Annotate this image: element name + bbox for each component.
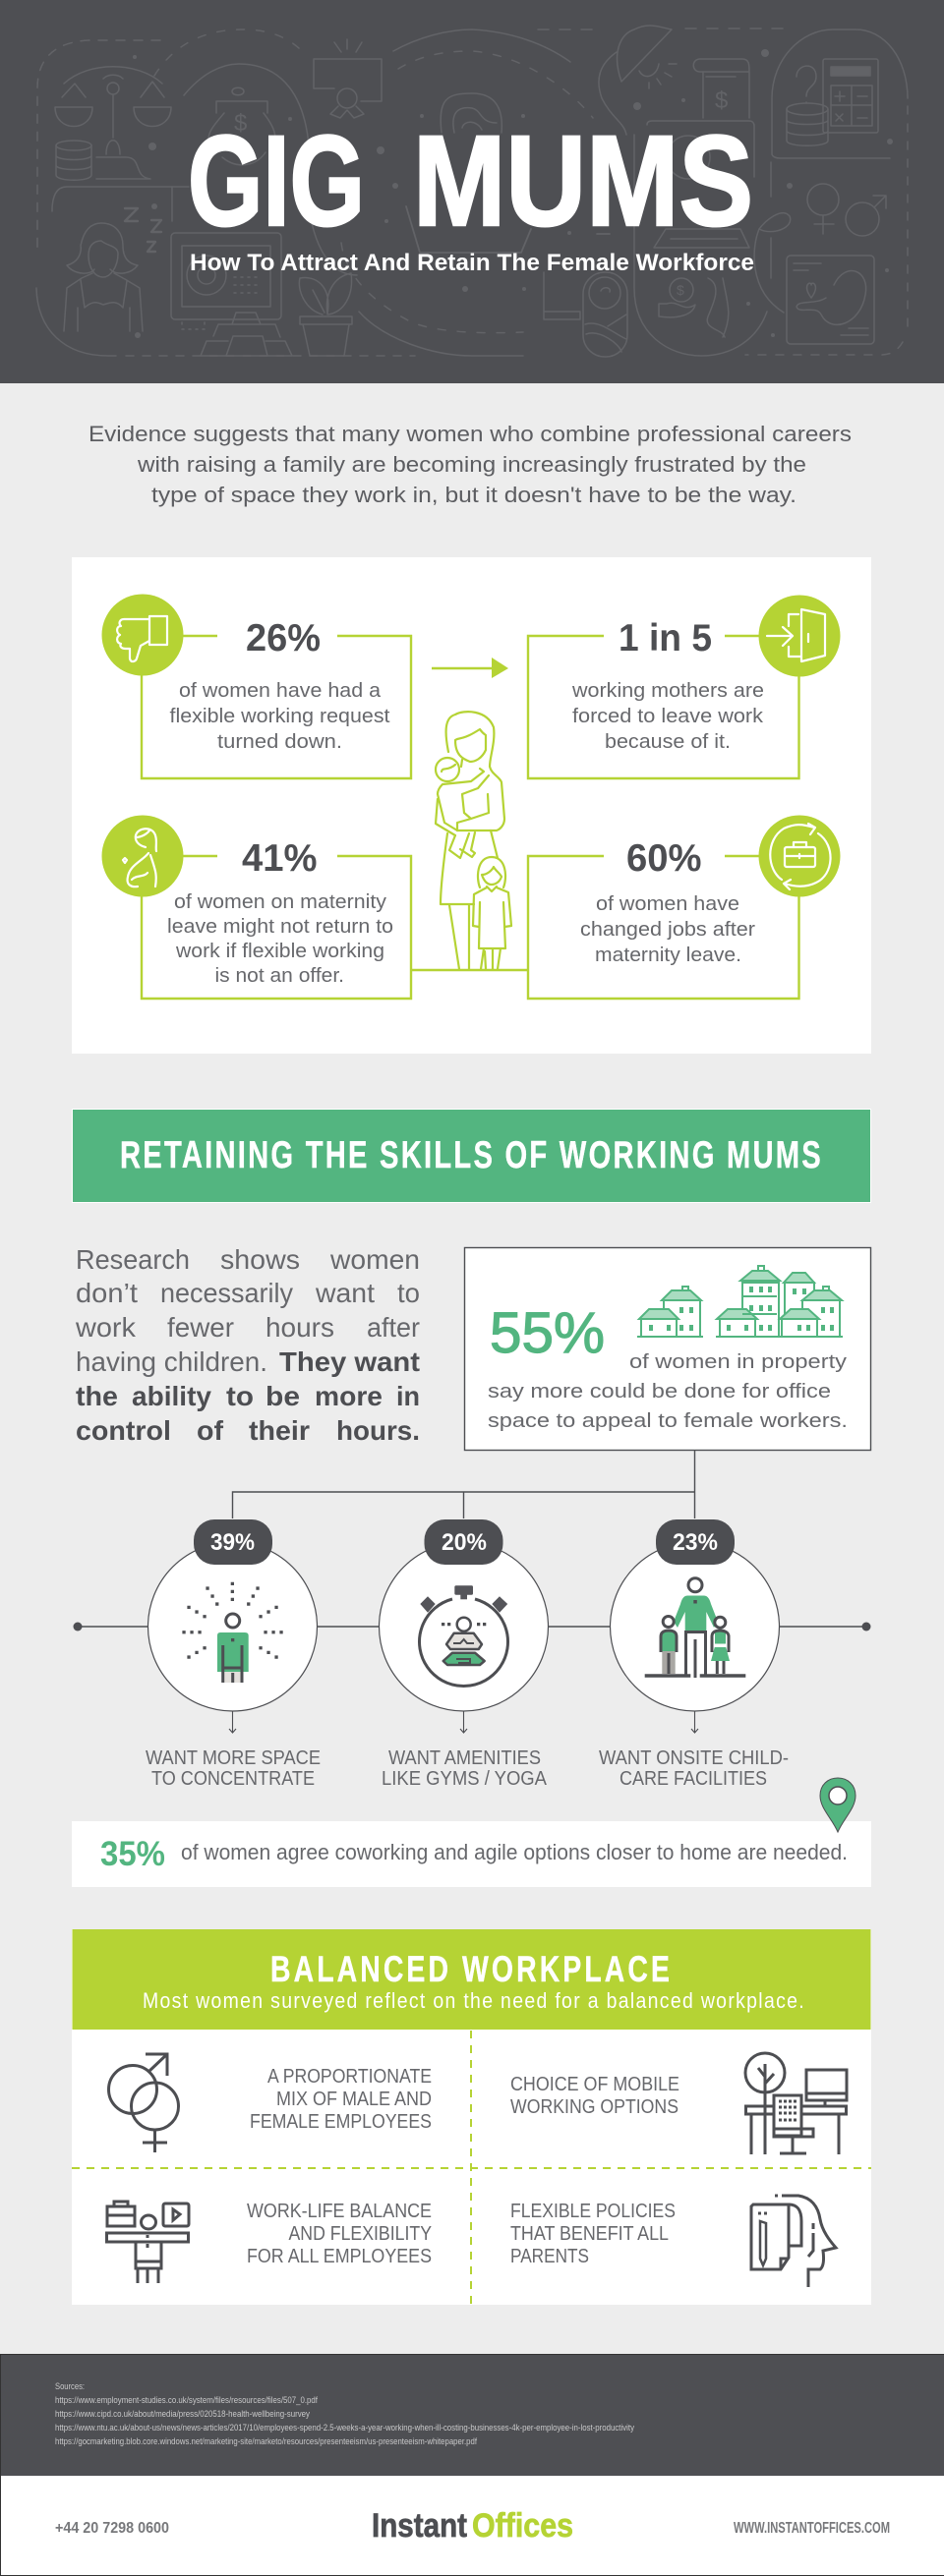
text block: research: hours. bbox=[336, 1415, 420, 1446]
gold bars bbox=[201, 313, 292, 356]
item: proportionate mix bbox=[108, 2054, 432, 2152]
stat: 26%: turned down. bbox=[217, 731, 342, 753]
text block: research: to bbox=[397, 1278, 420, 1308]
item: want more space: 39% bbox=[210, 1529, 255, 1556]
text block: research: their bbox=[249, 1415, 310, 1446]
text block: research: be bbox=[266, 1381, 300, 1411]
sources panel: https://www.ntu.ac.uk/about-us/news/news-articles/2017/10/employees-spend-2.5-weeks-a-year-working-when-ill-costing-businesses-4k-per-employee-in-lost-productivity bbox=[55, 2423, 634, 2433]
heading: balanced workplace: BALANCED WORKPLACE bbox=[270, 1949, 673, 1989]
text block: research: They want bbox=[279, 1346, 420, 1377]
header background line icons: $ bbox=[677, 282, 684, 298]
stat: 60%: maternity leave. bbox=[595, 945, 741, 966]
text block: research: the bbox=[76, 1381, 118, 1411]
text block: research: more bbox=[315, 1381, 383, 1411]
icon: briefcase refresh bbox=[770, 824, 831, 889]
stat box frames bbox=[142, 636, 798, 999]
stat: 60% bbox=[580, 816, 840, 966]
text block: research: after bbox=[367, 1312, 420, 1343]
text block: research: having children. bbox=[76, 1346, 267, 1377]
title: MUMS bbox=[413, 108, 753, 253]
icon: houses bbox=[637, 1266, 843, 1337]
item: work-life balance: FOR ALL EMPLOYEES bbox=[247, 2246, 432, 2267]
text block: research: to bbox=[226, 1381, 254, 1411]
title bbox=[188, 108, 753, 253]
ear bbox=[441, 93, 502, 133]
panel: balanced workplace bbox=[72, 1929, 871, 2305]
text block: research: hours bbox=[266, 1312, 334, 1343]
hat bbox=[599, 26, 767, 356]
basket bbox=[406, 206, 610, 253]
calculator bbox=[772, 29, 908, 158]
text block: research: in bbox=[396, 1381, 420, 1411]
item: proportionate mix: FEMALE EMPLOYEES bbox=[250, 2111, 432, 2133]
logo: Instant bbox=[372, 2507, 467, 2545]
icon: person with space bbox=[182, 1582, 283, 1683]
text block: research: shows bbox=[220, 1244, 300, 1275]
text block: research: work bbox=[75, 1312, 137, 1343]
purse bbox=[208, 87, 275, 165]
text block: research: control bbox=[76, 1415, 171, 1446]
item: want onsite childcare: CARE FACILITIES bbox=[620, 1768, 767, 1790]
callout: 55%: of women in property bbox=[629, 1351, 847, 1373]
stat: 26% bbox=[102, 594, 390, 753]
item: want more space bbox=[146, 1519, 321, 1790]
subtitle: How To Attract And Retain The Female Workforce bbox=[190, 250, 754, 276]
item: flexible policies: PARENTS bbox=[510, 2246, 589, 2267]
scroll bbox=[693, 59, 749, 118]
icon: pregnant woman bbox=[123, 829, 156, 887]
icon: head and notes bbox=[751, 2196, 836, 2287]
stat: 41%: leave might not return to bbox=[167, 916, 393, 938]
callout: 55%: say more could be done for office bbox=[488, 1381, 831, 1402]
item: flexible policies: THAT BENEFIT ALL bbox=[510, 2223, 669, 2245]
stat: 60%: changed jobs after bbox=[580, 919, 755, 941]
book and baby bbox=[544, 272, 580, 319]
intro text: with raising a family are becoming increasingly frustrated by the bbox=[137, 452, 806, 477]
sources panel: Sources: bbox=[55, 2381, 85, 2392]
stat: 41%: is not an offer. bbox=[214, 965, 344, 987]
text block: research: Research bbox=[76, 1244, 190, 1275]
stat: 41%: of women on maternity bbox=[174, 891, 386, 913]
callout: 55%: space to appeal to female workers. bbox=[488, 1410, 848, 1432]
icon: map pin bbox=[820, 1778, 856, 1832]
callout: 35% bbox=[72, 1778, 871, 1887]
stat: 60%: 60% bbox=[626, 837, 702, 880]
header banner bbox=[0, 0, 944, 383]
sources panel: https://www.employment-studies.co.uk/system/files/resources/files/507_0.pdf bbox=[55, 2395, 318, 2406]
title: GIG bbox=[188, 108, 365, 253]
text block: research bbox=[75, 1244, 420, 1446]
monitor bbox=[171, 233, 281, 319]
header background line icons: $ bbox=[715, 87, 728, 114]
stat: 26%: of women have had a bbox=[179, 680, 382, 702]
icon: family bbox=[645, 1578, 745, 1678]
text block: research: want bbox=[315, 1278, 375, 1308]
foetus panel bbox=[754, 162, 791, 313]
stat: 41%: 41% bbox=[242, 837, 317, 880]
callout: 35%: 35% bbox=[100, 1835, 165, 1873]
scales bbox=[55, 67, 171, 126]
item: want amenities: WANT AMENITIES bbox=[388, 1747, 541, 1769]
callout: 35%: of women agree coworking and agile options closer to home are needed. bbox=[181, 1840, 848, 1864]
item: proportionate mix: A PROPORTIONATE bbox=[267, 2066, 432, 2088]
stat: 41% bbox=[102, 816, 393, 987]
logo: Offices bbox=[472, 2507, 573, 2545]
stat: 26%: 26% bbox=[246, 617, 321, 659]
item: work-life balance bbox=[106, 2201, 432, 2283]
header background line icons bbox=[36, 26, 908, 357]
text block: research: of bbox=[197, 1415, 224, 1446]
panel: flexible working stats bbox=[72, 557, 871, 1054]
heading: balanced workplace: Most women surveyed reflect on the need for a balanced workplace. bbox=[143, 1988, 805, 2013]
heading: balanced workplace bbox=[73, 1929, 871, 2030]
item: want onsite childcare: WANT ONSITE CHILD- bbox=[599, 1747, 789, 1769]
stat: 1 in 5: because of it. bbox=[605, 731, 731, 753]
item: mobile working: CHOICE OF MOBILE bbox=[510, 2074, 679, 2095]
stat: 1 in 5: 1 in 5 bbox=[619, 617, 712, 659]
item: work-life balance: AND FLEXIBILITY bbox=[289, 2223, 432, 2245]
icon: person at desk bbox=[106, 2202, 189, 2283]
callout: 55%: 55% bbox=[490, 1301, 605, 1365]
heading: retaining the skills bbox=[73, 1109, 871, 1203]
sources panel bbox=[0, 2354, 944, 2476]
stat: 1 in 5: forced to leave work bbox=[572, 706, 764, 727]
item: want onsite childcare: 23% bbox=[673, 1529, 718, 1556]
item: want amenities: 20% bbox=[442, 1529, 487, 1556]
item: want amenities bbox=[380, 1519, 549, 1790]
arrow bbox=[460, 1711, 467, 1733]
sources panel: https://gocmarketing.blob.core.windows.net/marketing-site/marketo/resources/presenteeism/us-presenteeism-whitepaper.pdf bbox=[55, 2436, 477, 2447]
icon: thumbs down bbox=[117, 616, 167, 661]
icon: mother and children bbox=[436, 712, 511, 969]
stat: 60%: of women have bbox=[596, 893, 739, 915]
gender bbox=[807, 184, 839, 215]
header background line icons: $ bbox=[234, 110, 247, 137]
stat: 41%: work if flexible working bbox=[175, 941, 384, 962]
stat: 1 in 5: working mothers are bbox=[571, 680, 764, 702]
plant bbox=[299, 273, 352, 356]
item: want more space: TO CONCENTRATE bbox=[151, 1768, 315, 1790]
connector lines bbox=[82, 1450, 862, 1627]
footer: +44 20 7298 0600 bbox=[55, 2520, 169, 2537]
item: flexible policies: FLEXIBLE POLICIES bbox=[510, 2201, 676, 2222]
arrow bbox=[691, 1711, 698, 1733]
item: want amenities: LIKE GYMS / YOGA bbox=[382, 1768, 548, 1790]
stat: 1 in 5 bbox=[571, 596, 840, 753]
coin, hand, woman bbox=[670, 278, 693, 302]
callout: 55% bbox=[464, 1248, 871, 1451]
item: work-life balance: WORK-LIFE BALANCE bbox=[247, 2201, 432, 2222]
certificate bbox=[314, 39, 382, 101]
item: mobile working: WORKING OPTIONS bbox=[510, 2096, 678, 2118]
item: want more space: WANT MORE SPACE bbox=[146, 1747, 321, 1769]
woman bbox=[67, 223, 138, 273]
text block: research: women bbox=[329, 1244, 420, 1275]
footer bbox=[0, 2354, 944, 2576]
icon: yoga stopwatch bbox=[419, 1585, 507, 1687]
item: flexible policies bbox=[510, 2196, 836, 2287]
sources panel: https://www.cipd.co.uk/about/media/press/020518-health-wellbeing-survey bbox=[55, 2409, 310, 2420]
arrow bbox=[432, 658, 508, 678]
intro text: type of space they work in, but it doesn't have to be the way. bbox=[151, 483, 796, 507]
text block: research: necessarily bbox=[160, 1278, 293, 1308]
text block: research: ability bbox=[132, 1381, 211, 1411]
text block: research: fewer bbox=[167, 1312, 234, 1343]
item: want onsite childcare bbox=[599, 1519, 789, 1790]
icon: exit door bbox=[767, 609, 825, 661]
arrow bbox=[229, 1711, 236, 1733]
dots bbox=[133, 49, 893, 338]
stat: 26%: flexible working request bbox=[169, 706, 390, 727]
icon: desk and tree bbox=[745, 2053, 847, 2154]
intro text: Evidence suggests that many women who combine professional careers bbox=[88, 422, 852, 446]
text block: research: don’t bbox=[76, 1278, 138, 1308]
icon: gender symbols bbox=[108, 2054, 179, 2152]
item: mobile working bbox=[510, 2053, 847, 2154]
item: proportionate mix: MIX OF MALE AND bbox=[276, 2089, 432, 2110]
laptop bbox=[647, 121, 754, 248]
logo bbox=[372, 2507, 573, 2545]
intro text bbox=[88, 422, 852, 507]
